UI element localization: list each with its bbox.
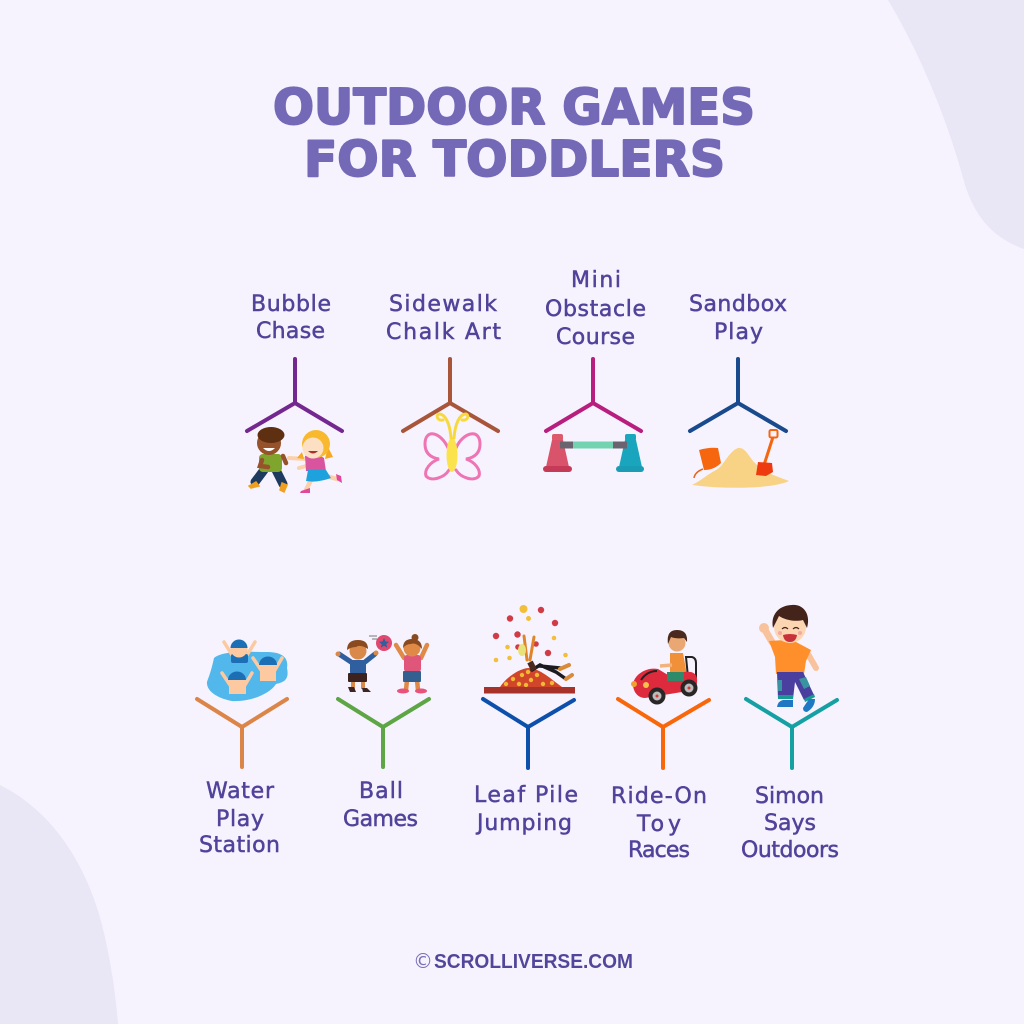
label bbox=[343, 779, 418, 832]
connector bbox=[403, 359, 498, 431]
label: Races bbox=[628, 838, 690, 863]
label: Chalk Art bbox=[386, 320, 501, 345]
label: Ride-On bbox=[611, 784, 707, 809]
icon: children running bbox=[249, 427, 342, 493]
label: Play bbox=[714, 320, 763, 345]
label: Obstacle bbox=[545, 297, 646, 322]
label bbox=[251, 292, 331, 344]
icon: laughing boy bbox=[759, 605, 816, 712]
label: Leaf Pile bbox=[474, 783, 578, 808]
label bbox=[611, 784, 707, 863]
label: Sandbox bbox=[689, 292, 787, 317]
label: Station bbox=[199, 833, 280, 858]
label: Outdoors bbox=[741, 838, 839, 863]
game: Mini Obstacle Course bbox=[543, 268, 646, 472]
game: Leaf Pile Jumping bbox=[474, 605, 578, 836]
game: Water Play Station bbox=[197, 640, 288, 858]
connector bbox=[338, 699, 429, 767]
connector bbox=[197, 699, 287, 767]
label: Toy bbox=[636, 812, 681, 837]
label bbox=[689, 292, 787, 345]
label bbox=[199, 779, 280, 858]
label: Says bbox=[764, 811, 816, 836]
title bbox=[273, 79, 755, 188]
game: Ball Games bbox=[336, 634, 429, 832]
footer credit: SCROLLIVERSE.COM bbox=[434, 950, 633, 973]
icon: children in pool bbox=[207, 640, 288, 701]
icon: cones and bar bbox=[543, 434, 644, 472]
game: Simon Says Outdoors bbox=[741, 605, 839, 863]
game: Sandbox Play bbox=[689, 292, 789, 488]
label: Mini bbox=[571, 268, 621, 293]
icon: child on red car bbox=[631, 630, 698, 704]
label: Bubble bbox=[251, 292, 331, 317]
label: Sidewalk bbox=[389, 292, 497, 317]
connector bbox=[618, 699, 709, 768]
connector bbox=[546, 359, 641, 431]
corner shape: top right bbox=[888, 0, 1024, 249]
game: Ride-On Toy Races bbox=[611, 630, 709, 863]
footer credit: © bbox=[413, 949, 433, 973]
label: Ball bbox=[359, 779, 403, 804]
label bbox=[474, 783, 578, 836]
label bbox=[741, 784, 839, 863]
connector bbox=[746, 699, 837, 768]
label: Jumping bbox=[475, 811, 572, 836]
corner shape: bottom left bbox=[0, 785, 118, 1024]
label: Water bbox=[206, 779, 275, 804]
label: Play bbox=[216, 807, 264, 832]
icon: children with ball bbox=[336, 634, 427, 694]
title: FOR TODDLERS bbox=[304, 131, 725, 188]
label: Chase bbox=[256, 319, 325, 344]
game: Sidewalk Chalk Art bbox=[386, 292, 501, 479]
title: OUTDOOR GAMES bbox=[273, 79, 755, 136]
label bbox=[386, 292, 501, 345]
label: Course bbox=[556, 325, 635, 350]
label: Simon bbox=[755, 784, 824, 809]
game: Bubble Chase bbox=[247, 292, 342, 493]
connector bbox=[483, 699, 574, 768]
label bbox=[545, 268, 646, 350]
label: Games bbox=[343, 807, 418, 832]
icon: child in leaf pile bbox=[484, 605, 575, 694]
connector bbox=[247, 359, 342, 431]
icon: sand pile, bucket and shovel bbox=[692, 430, 789, 488]
connector bbox=[690, 359, 786, 431]
icon: chalk butterfly bbox=[425, 414, 480, 479]
